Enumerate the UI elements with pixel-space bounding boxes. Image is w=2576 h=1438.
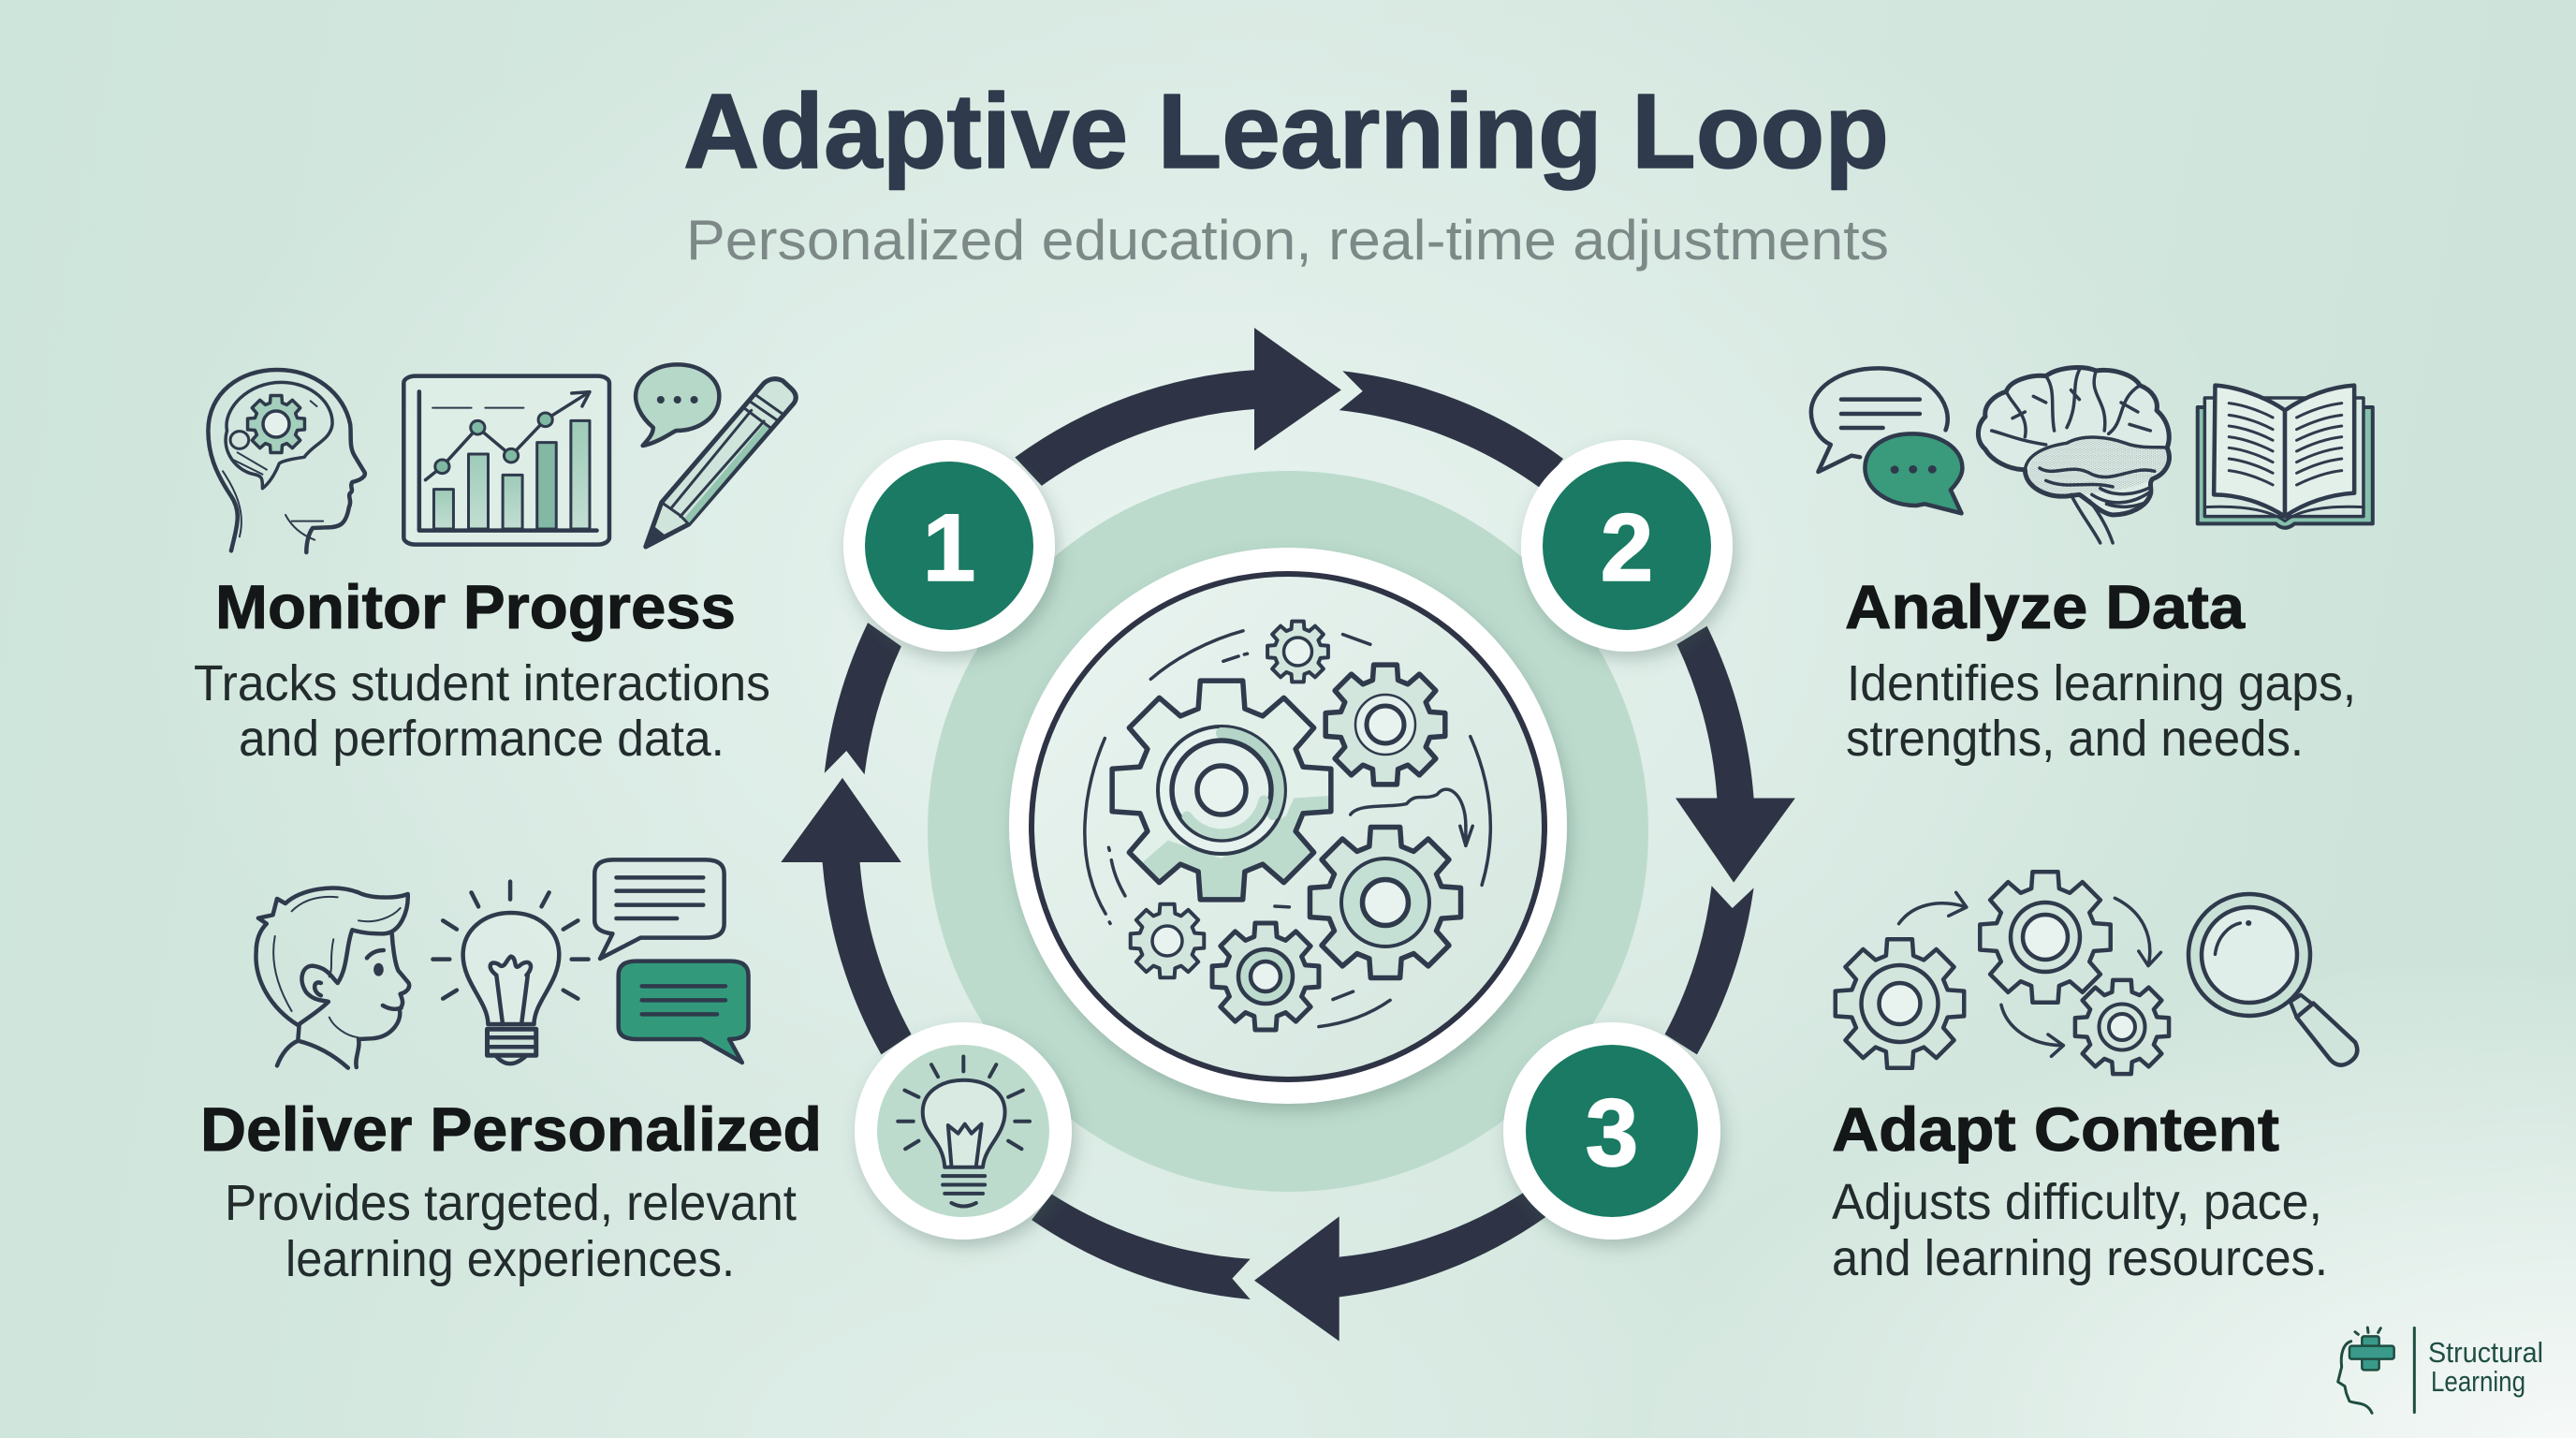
- logo: Structural Learning: Structural: [2428, 1336, 2543, 1369]
- title: Adaptive Learning Loop: [683, 72, 1889, 190]
- gear bottom middle: [1212, 923, 1319, 1030]
- description: and learning resources.: [1832, 1230, 2328, 1286]
- pale green disc: [928, 471, 1648, 1192]
- big gear: [1112, 681, 1336, 908]
- step 4 badge: lightbulb: [855, 1022, 1072, 1240]
- step 1 badge: [843, 440, 1055, 652]
- icon: magnifying glass: [2188, 894, 2357, 1065]
- icon: speech bubble: [636, 364, 719, 446]
- step 3 badge: [1503, 1022, 1720, 1240]
- central diagram: adaptive loop: [194, 328, 2543, 1413]
- description: learning experiences.: [285, 1231, 735, 1287]
- description: and performance data.: [239, 711, 724, 767]
- description: Identifies learning gaps,: [1847, 655, 2356, 712]
- description: [1832, 1174, 2328, 1286]
- icon: lightbulb: [432, 882, 589, 1064]
- description: [194, 655, 770, 767]
- step 3 badge: 3: [1586, 1079, 1638, 1186]
- icon: head with gear: [208, 370, 365, 552]
- heading: Adapt Content: [1832, 1094, 2279, 1164]
- icon: rising chart: [403, 376, 609, 545]
- panel: deliver personalized: [200, 859, 822, 1287]
- heading: Monitor Progress: [215, 572, 736, 641]
- step 2 badge: [1521, 440, 1733, 652]
- description: Provides targeted, relevant: [225, 1175, 797, 1231]
- center gears medallion: [1009, 548, 1567, 1104]
- subtitle: Personalized education, real-time adjustments: [686, 209, 1889, 271]
- step 2 badge: 2: [1601, 494, 1653, 601]
- gear lower right: [1310, 827, 1461, 978]
- panel: analyze data: [1811, 368, 2373, 767]
- description: [225, 1175, 797, 1287]
- cycle arrows: [781, 328, 1795, 1342]
- icon: open book: [2198, 386, 2373, 528]
- heading: Analyze Data: [1845, 572, 2246, 641]
- icon: brain: [1978, 368, 2169, 543]
- icon: boy profile: [256, 888, 409, 1068]
- description: [1846, 655, 2356, 767]
- gear top right: [1325, 665, 1445, 785]
- step 1 badge: 1: [923, 494, 975, 601]
- panel: adapt content: [1832, 872, 2357, 1286]
- panel: monitor progress: [194, 364, 796, 767]
- logo: Structural Learning: [2338, 1328, 2543, 1413]
- heading: Deliver Personalized: [200, 1094, 822, 1164]
- icon: message bubbles: [594, 859, 749, 1063]
- description: strengths, and needs.: [1846, 711, 2304, 767]
- icon: gears with arrows: [1836, 872, 2169, 1074]
- small gear bottom left: [1131, 904, 1204, 977]
- icon: pencil: [646, 379, 796, 547]
- description: Adjusts difficulty, pace,: [1832, 1174, 2322, 1230]
- motion lines: [1085, 631, 1490, 1027]
- small gear top: [1267, 622, 1328, 682]
- logo: Structural Learning: Learning: [2431, 1365, 2525, 1398]
- icon: chat bubbles: [1811, 368, 1962, 513]
- description: Tracks student interactions: [194, 655, 770, 712]
